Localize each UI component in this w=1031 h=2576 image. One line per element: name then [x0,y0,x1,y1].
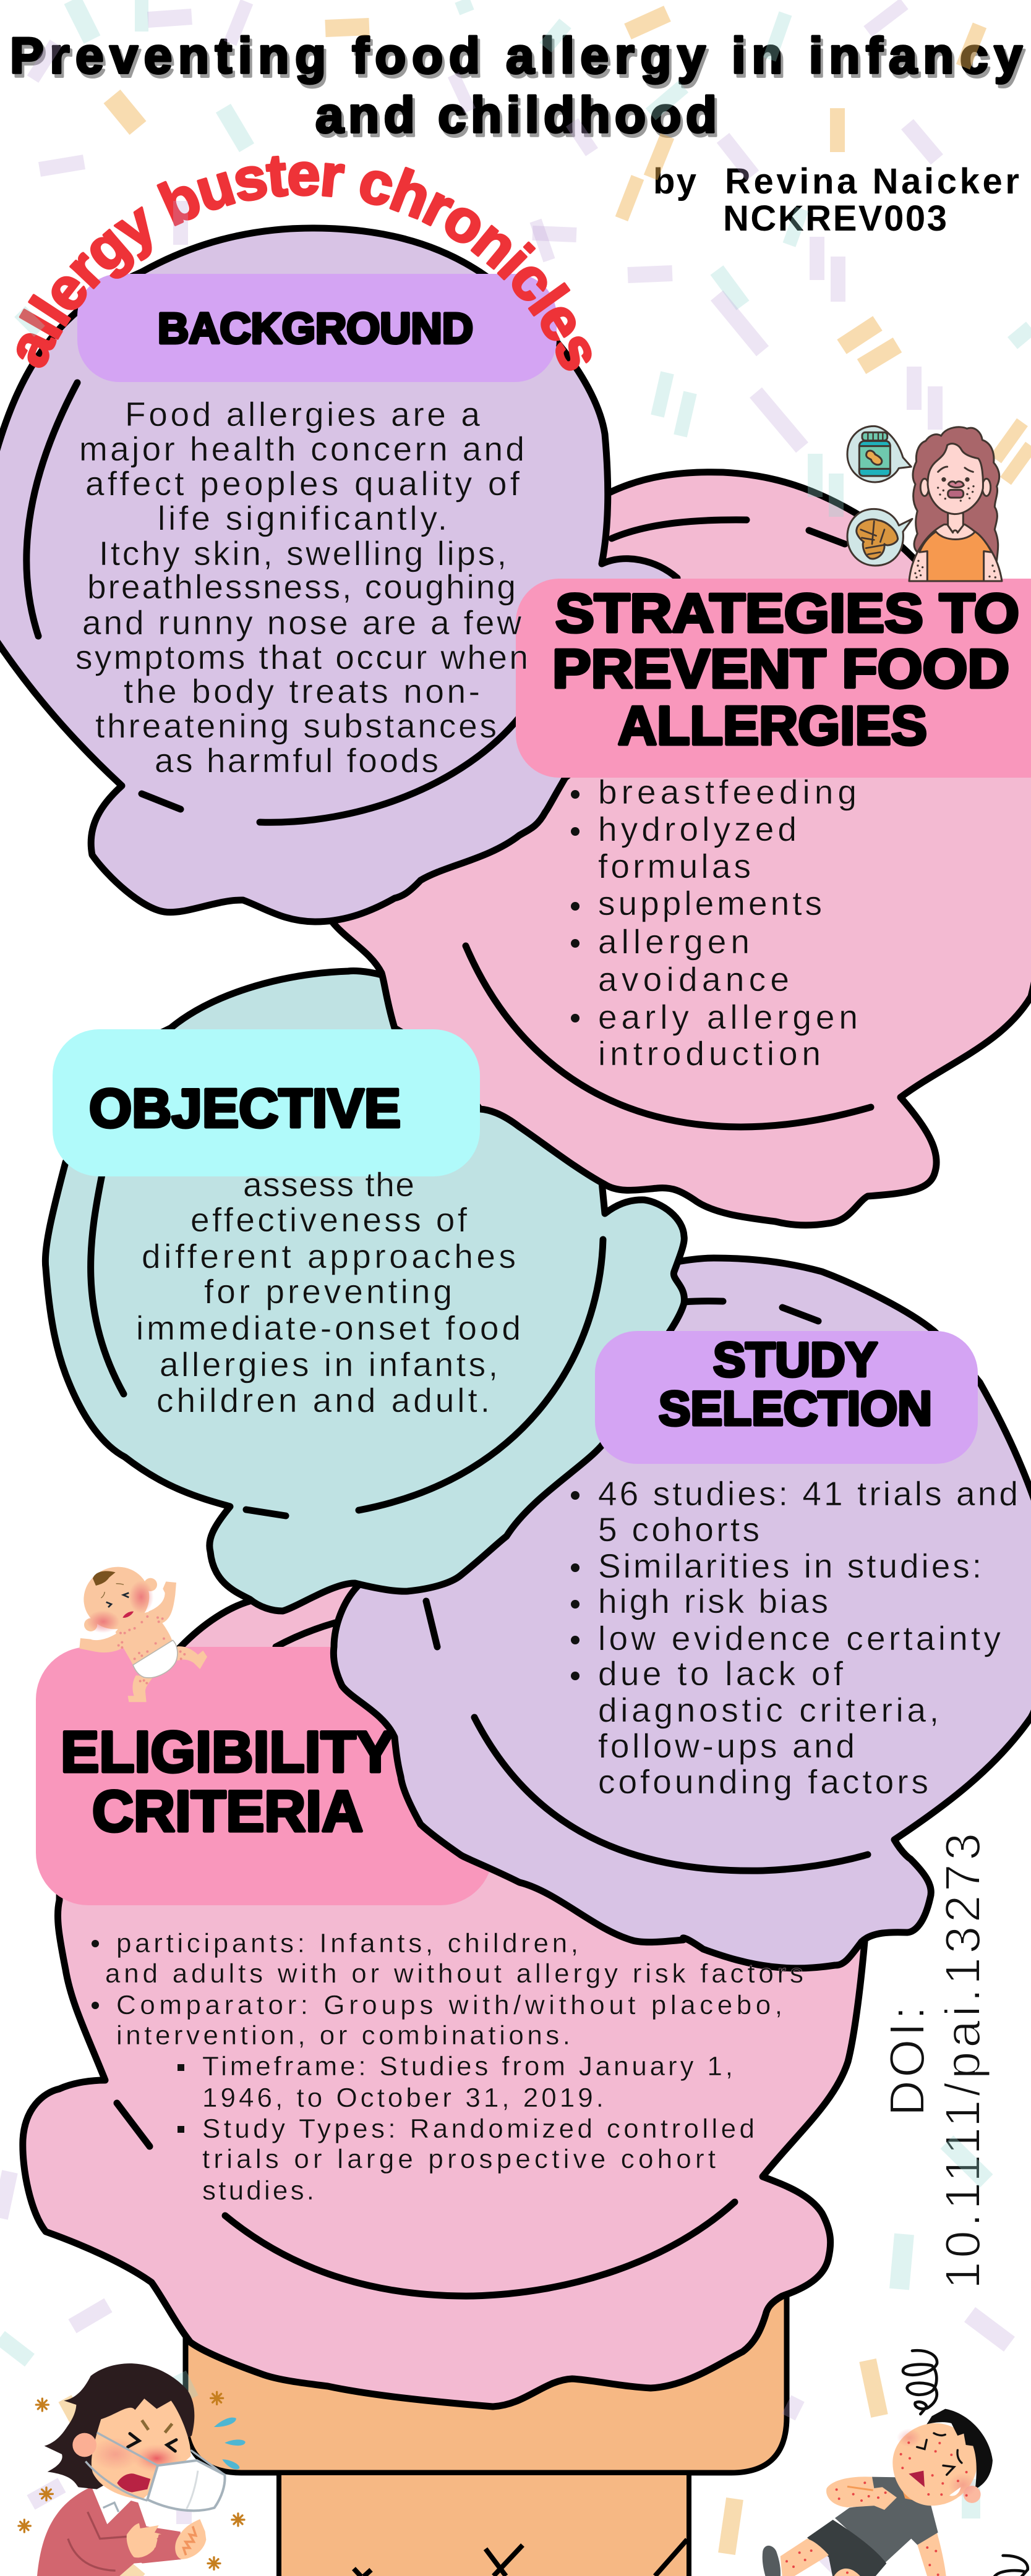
text block: objective: for preventing [204,1272,452,1311]
text block: background: affect peoples quality of [85,464,520,503]
list: study selection [571,1474,1018,1801]
list: strategies: breastfeeding [598,773,857,811]
text block: background: major health concern and [79,430,524,468]
list: study selection: high risk bias [598,1582,828,1620]
text block: background: Itchy skin, swelling lips, [99,534,507,572]
scoop: objective [45,971,684,1611]
ice cream cone [186,2287,787,2576]
list: strategies: introduction [598,1034,821,1073]
title: Preventing food allergy in infancy [10,28,1022,84]
DOI rotated text: DOI: [879,2006,935,2116]
heading label: background [77,274,557,382]
text block: background: and runny nose are a few [82,603,521,642]
text block: objective: assess the [243,1165,414,1204]
title: and childhood [315,87,717,143]
author credit: by [653,161,696,202]
author credit: Revina Naicker [725,161,1019,202]
list: study selection: cofounding factors [598,1762,928,1801]
text block: background: breathlessness, coughing [87,567,516,606]
heading label: study selection: SELECTION [659,1381,932,1435]
heading label: strategies to prevent food allergies [516,579,1031,778]
list: study selection: due to lack of [598,1654,844,1693]
title [10,28,1025,147]
text block: objective [136,1165,521,1419]
heading label: objective [53,1029,480,1176]
list: strategies: supplements [598,884,822,922]
list: study selection: 5 cohorts [598,1510,759,1549]
heading label: strategies to prevent food allergies: PREVENT FOOD [552,638,1009,699]
list: strategies: formulas [598,847,751,885]
list: strategies: avoidance [598,960,789,998]
list: eligibility criteria: Study Types: Randomized controlled [202,2114,755,2144]
text block: objective: immediate-onset food [136,1309,521,1347]
list: strategies [571,773,858,1073]
list: study selection: 46 studies: 41 trials and [598,1474,1018,1513]
list: study selection: Similarities in studies: [598,1547,982,1585]
list: eligibility criteria: Timeframe: Studies from January 1, [202,2051,733,2081]
heading label: strategies to prevent food allergies: STRATEGIES TO [555,582,1019,644]
heading box: eligibility criteria [36,1647,493,1905]
list: eligibility criteria [92,1928,803,2206]
text block: objective: different approaches [142,1237,516,1275]
author credit [653,161,1019,239]
text block: objective: children and adult. [156,1381,490,1419]
DOI rotated text: 10.1111/pai.13273 [935,1833,990,2289]
list: eligibility criteria: trials or large prospective cohort [202,2144,716,2174]
heading label: study selection [595,1331,978,1464]
title: Preventing food allergy in infancy [12,32,1025,88]
text block: objective: effectiveness of [190,1201,468,1239]
list: strategies: hydrolyzed [598,810,797,848]
icon: boy collapsed with rash [763,2350,1028,2576]
author credit: NCKREV003 [723,198,947,239]
text block: objective: allergies in infants, [160,1345,498,1384]
DOI rotated text [879,1833,990,2289]
heading label: objective: OBJECTIVE [89,1078,401,1139]
text block: background: Food allergies are a [125,395,480,433]
text block: background: symptoms that occur when [75,638,528,676]
heading text: eligibility criteria: ELIGIBILITY [61,1719,395,1784]
icon: baby with rash [75,1558,207,1702]
heading text: eligibility criteria [61,1719,395,1843]
title: and childhood [318,91,719,147]
scoop: eligibility criteria [23,1545,866,2407]
text block: background [75,395,528,780]
list: strategies: allergen [598,922,750,961]
heading text: eligibility criteria: CRITERIA [92,1779,363,1843]
heading label: study selection: STUDY [713,1332,878,1387]
list: eligibility criteria: and adults with or without allergy risk factors [105,1958,803,1989]
curved subtitle: allergy buster chronicles [16,156,592,371]
list: eligibility criteria: intervention, or combinations. [116,2020,570,2051]
scoop: background [0,228,680,922]
list: eligibility criteria: Comparator: Groups with/without placebo, [116,1990,782,2020]
icon: woman coughing with mask [19,2363,246,2576]
text block: background: life significantly. [158,499,447,537]
list: study selection: follow-ups and [598,1727,855,1765]
scoop: strategies [309,472,1031,1225]
text block: background: the body treats non- [124,672,480,710]
list: study selection: diagnostic criteria, [598,1691,939,1729]
list: eligibility criteria: participants: Infants, children, [116,1928,578,1958]
list: eligibility criteria: 1946, to October 31, 2019. [202,2083,604,2113]
list: eligibility criteria: studies. [202,2175,314,2206]
heading label: strategies to prevent food allergies: ALLERGIES [618,695,927,756]
list: study selection: low evidence certainty [598,1619,1001,1657]
heading label: background: BACKGROUND [158,304,473,352]
text block: background: threatening substances [95,707,497,745]
text block: background: as harmful foods [155,741,438,780]
scoop: study selection [333,1258,1031,1968]
icon: woman with allergy rash and peanut speech bubbles [847,426,1002,581]
list: strategies: early allergen [598,998,858,1036]
